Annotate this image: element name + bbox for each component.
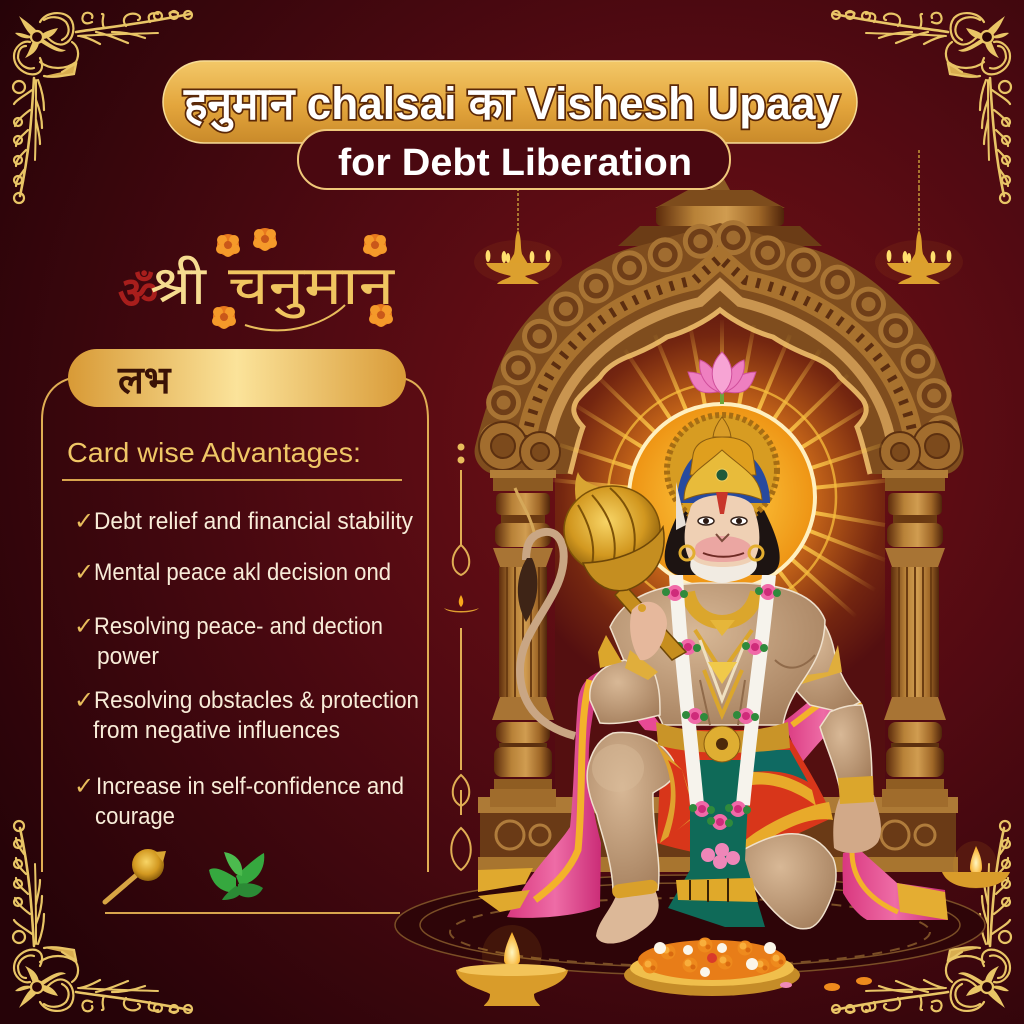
hanuman figure [564, 415, 881, 944]
diya: bottom centre [456, 925, 568, 1006]
list item 4: ✓ [74, 687, 94, 714]
icon: mace [105, 849, 166, 902]
crown front [684, 450, 762, 500]
halo [629, 404, 815, 590]
subtitle banner [298, 130, 730, 189]
subheading: Card wise Advantages: [67, 437, 361, 468]
plinth [478, 797, 958, 872]
list item 3: power [97, 643, 159, 670]
halo ring [608, 383, 836, 611]
rosette band [497, 230, 943, 440]
hair [665, 510, 780, 575]
left hand [630, 602, 667, 660]
tail tuft [518, 558, 537, 622]
corner ornament: bottom right [832, 821, 1011, 1013]
pillar: left [490, 470, 556, 807]
panel frame [42, 378, 428, 872]
list item 2: Mental peace akl decision ond [94, 559, 391, 586]
left forearm [590, 660, 660, 723]
right bangle [838, 776, 874, 804]
icon: tulsi leaves [209, 852, 264, 900]
corner ornament: bottom left [13, 821, 192, 1013]
garland flowers [662, 584, 781, 869]
eyes [698, 517, 747, 525]
panel heading text: लभ [117, 360, 172, 402]
left anklet [611, 879, 659, 899]
sun rays [552, 320, 892, 650]
list item 1: ✓ [74, 508, 94, 535]
waist belt [656, 722, 790, 753]
blue crown panel [677, 445, 770, 503]
dhoti green front [668, 760, 765, 927]
left leg [587, 732, 675, 890]
list item 4: Resolving obstacles & protection [94, 687, 419, 714]
corner ornament: top right [832, 11, 1011, 203]
outer carved arch [475, 223, 964, 474]
niche rim [570, 310, 870, 474]
scroll band [525, 258, 915, 452]
earrings [680, 546, 763, 560]
tilak [716, 492, 728, 514]
left armlet [598, 635, 622, 668]
shri text: श्री [150, 255, 207, 316]
flower plate [624, 938, 800, 996]
lotus [688, 352, 756, 404]
list item 5: ✓ [74, 773, 94, 800]
right armlet [793, 645, 842, 686]
right thigh [743, 834, 836, 929]
shorts [657, 730, 832, 858]
panel heading pill [68, 349, 406, 407]
divider ornament [444, 444, 479, 870]
scroll ends [479, 422, 961, 472]
hanuman text: चनुमान [228, 256, 395, 319]
flowers [216, 234, 240, 257]
list item 1: Debt relief and financial stability [94, 508, 413, 535]
subtitle text: for Debt Liberation [338, 142, 692, 184]
necklace gold [688, 592, 757, 715]
heading: shri hanuman [118, 228, 395, 330]
right forearm [820, 705, 872, 790]
temple arch [475, 172, 964, 800]
corner ornament: top left [13, 11, 192, 203]
subheading rule [62, 479, 402, 481]
muscle shading [700, 655, 815, 725]
list item 4: from negative influences [93, 717, 340, 744]
diya: right [942, 841, 1010, 889]
hanging lamp: right [875, 188, 963, 284]
om mark: ॐ [118, 269, 158, 318]
title banner [163, 61, 857, 143]
chain: right lamp [918, 150, 920, 190]
helmet [690, 437, 756, 475]
left foot [596, 890, 659, 944]
crown back [667, 415, 777, 525]
dome and finial [618, 172, 822, 246]
list item 3: Resolving peace- and dection [94, 613, 383, 640]
mace [564, 472, 686, 660]
garlands [676, 575, 769, 805]
right hand [833, 795, 881, 853]
left bangle [625, 650, 658, 680]
list item 5: Increase in self-confidence and [96, 773, 404, 800]
bottom rule [105, 912, 400, 914]
beard [690, 558, 757, 583]
pillar: right [882, 470, 948, 807]
tail [515, 488, 575, 736]
torso [610, 583, 825, 725]
floor mandala [395, 875, 985, 975]
right upper arm [785, 600, 860, 712]
sash: left [478, 670, 665, 918]
hanging lamp: left [474, 188, 562, 284]
list item 3: ✓ [74, 613, 94, 640]
list item 5: courage [95, 803, 175, 830]
muzzle [695, 536, 751, 562]
face [685, 495, 759, 577]
list item 2: ✓ [74, 559, 94, 586]
cusped niche [555, 310, 885, 800]
title text: हनुमान chalsai का Vishesh Upaay [183, 78, 840, 132]
panel: advantages [42, 349, 428, 913]
sash: right [783, 686, 948, 920]
scattered petals [780, 977, 872, 991]
